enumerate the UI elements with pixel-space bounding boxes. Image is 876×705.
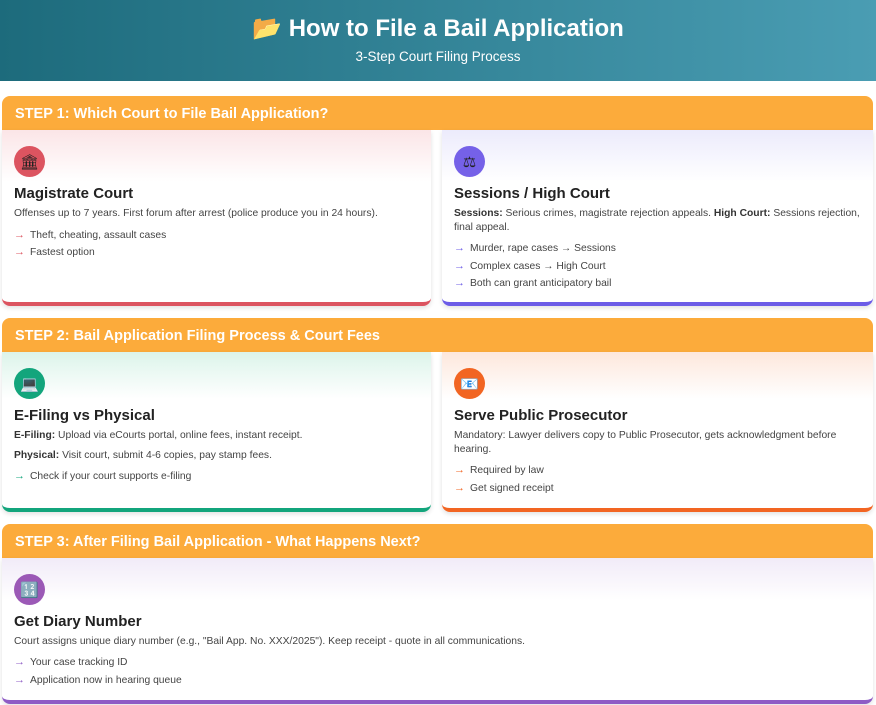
- panel: diary number: [2, 558, 873, 704]
- header: [0, 0, 876, 81]
- text: Mandatory: Lawyer delivers copy to Public Prosecutor, gets acknowledgment before hearing.: [454, 430, 836, 455]
- bullets: [14, 229, 166, 258]
- panel: magistrate court: [2, 130, 431, 306]
- panel: public prosecutor: [442, 352, 873, 512]
- icon: numbers: 🔢: [20, 582, 39, 598]
- icon: laptop: 💻: [20, 376, 39, 392]
- panel: e-filing: [2, 352, 431, 512]
- text: Sessions: Serious crimes, magistrate rejection appeals. High Court: Sessions rejection, final appeal.: [454, 208, 860, 233]
- bullet: → Check if your court supports e-filing: [14, 470, 191, 482]
- heading: Sessions / High Court: [454, 185, 610, 202]
- bullets: → Both can grant anticipatory bail: [454, 277, 611, 289]
- bullets: → Application now in hearing queue: [14, 674, 182, 686]
- bullets: [14, 656, 182, 686]
- heading: E-Filing vs Physical: [14, 407, 155, 424]
- icon: court: 🏛: [20, 154, 39, 170]
- title: 📂 How to File a Bail Application: [252, 15, 624, 42]
- text: E-Filing: Upload via eCourts portal, online fees, instant receipt.: [14, 430, 302, 441]
- step 2 heading: [2, 318, 873, 352]
- panel: e-filing: Physical: Visit court, submit 4-6 copies, pay stamp fees.: [14, 450, 272, 461]
- bullets: → Theft, cheating, assault cases: [14, 229, 166, 241]
- text: Offenses up to 7 years. First forum after arrest (police produce you in 24 hours).: [14, 208, 378, 219]
- icon: scales: ⚖: [463, 154, 476, 170]
- bullets: → Get signed receipt: [454, 482, 554, 494]
- step 1 heading: STEP 1: Which Court to File Bail Application?: [15, 106, 328, 122]
- step 1 heading: [2, 96, 873, 130]
- step 3 heading: [2, 524, 873, 558]
- icon: envelope: [454, 368, 485, 399]
- step 3 heading: STEP 3: After Filing Bail Application - What Happens Next?: [15, 534, 420, 550]
- bullets: [454, 464, 554, 494]
- bullets: [454, 242, 616, 289]
- heading: Get Diary Number: [14, 613, 142, 630]
- step 2 heading: STEP 2: Bail Application Filing Process & Court Fees: [15, 328, 380, 344]
- bullets: → Your case tracking ID: [14, 656, 128, 668]
- heading: Serve Public Prosecutor: [454, 407, 627, 424]
- icon: laptop: [14, 368, 45, 399]
- icon: numbers: [14, 574, 45, 605]
- heading: Magistrate Court: [14, 185, 133, 202]
- icon: court: [14, 146, 45, 177]
- bullets: → Required by law: [454, 464, 544, 476]
- subtitle: 3-Step Court Filing Process: [355, 49, 521, 64]
- bullets: → Murder, rape cases → Sessions: [454, 242, 616, 254]
- text: Court assigns unique diary number (e.g., "Bail App. No. XXX/2025"). Keep receipt - quote in all communications.: [14, 636, 525, 647]
- bullets: → Fastest option: [14, 246, 95, 258]
- panel: sessions high court: [442, 130, 873, 306]
- bullets: → Complex cases → High Court: [454, 260, 606, 272]
- icon: scales: [454, 146, 485, 177]
- icon: envelope: 📧: [460, 376, 479, 392]
